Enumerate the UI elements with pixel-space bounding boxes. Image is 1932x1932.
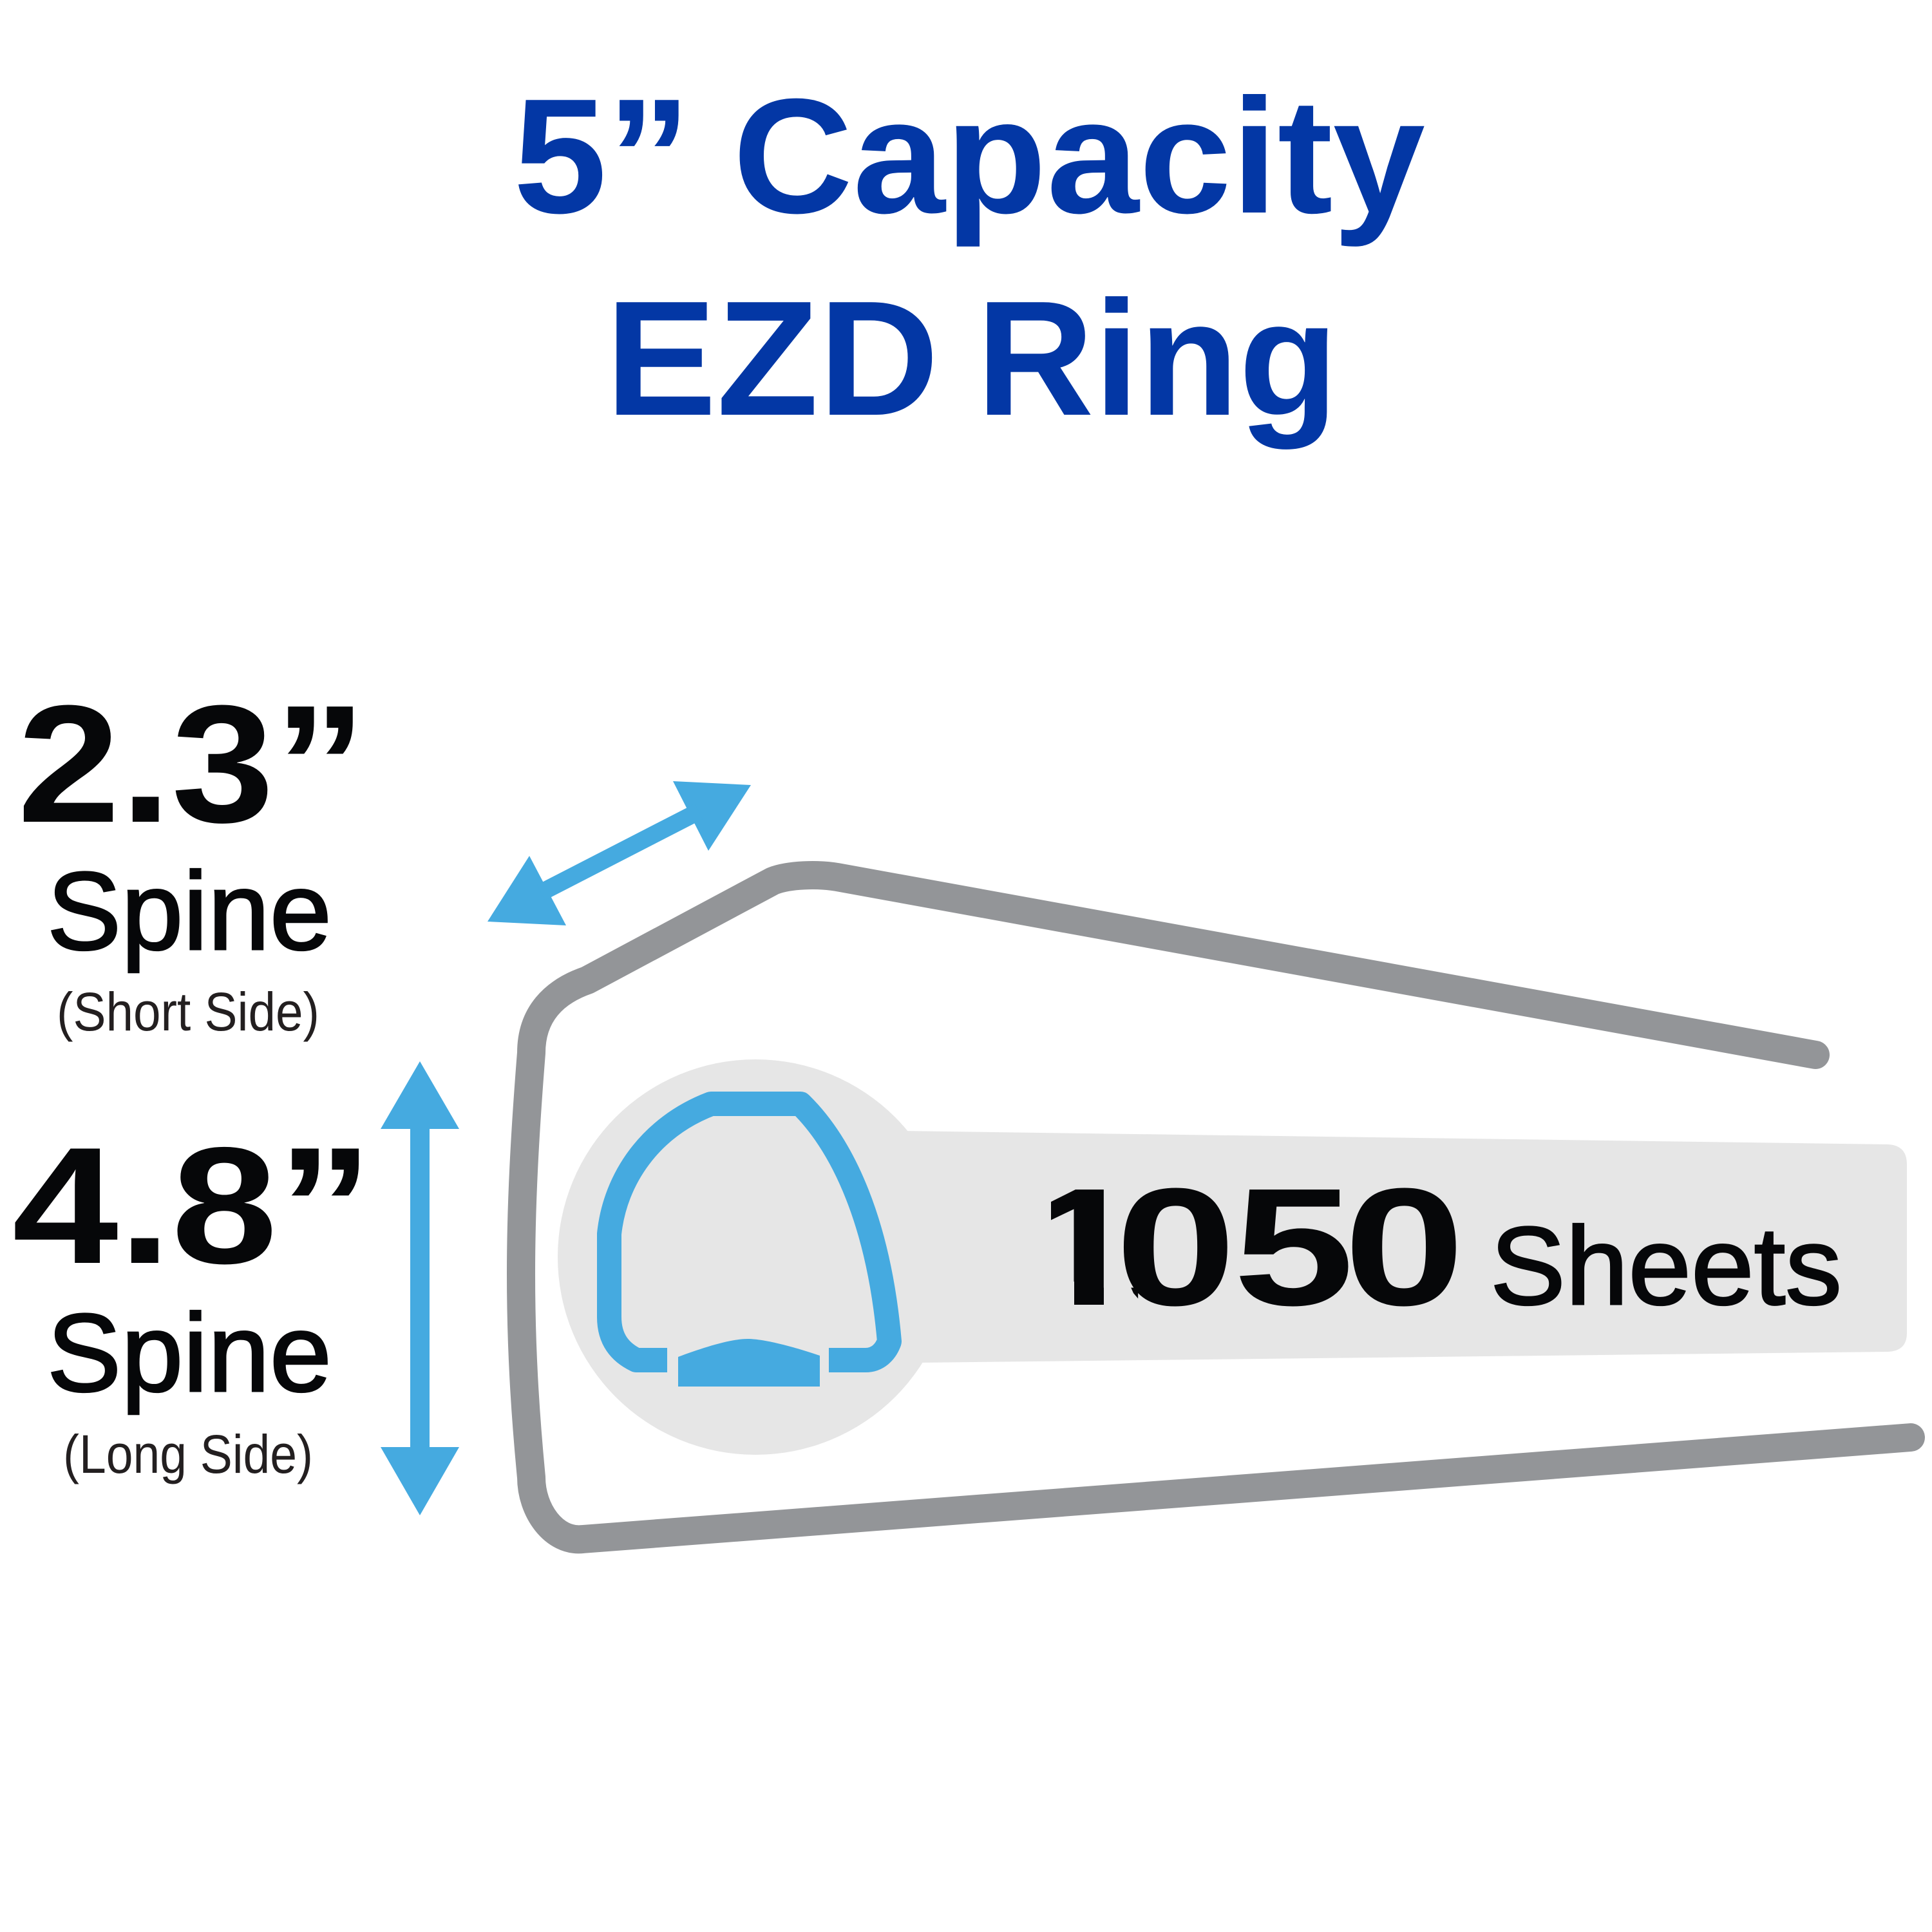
measurement: long side spine	[12, 1112, 373, 1484]
measurement: long side spine: Spine	[47, 1291, 332, 1415]
measurement: long side spine: (Long Side)	[63, 1424, 313, 1484]
arrow: spine long side	[381, 1061, 459, 1515]
sheet capacity label: 1050	[1023, 1153, 1464, 1340]
measurement: long side spine: 4.8”	[12, 1112, 373, 1298]
arrow: spine short side	[488, 781, 751, 925]
sheet capacity callout background	[558, 1059, 1907, 1455]
measurement: short side spine	[17, 671, 366, 1042]
binder outline	[521, 875, 1911, 1539]
title: Capacity	[733, 64, 1425, 247]
title: EZD	[605, 267, 939, 450]
sheet capacity label	[1051, 1188, 1839, 1306]
sheet capacity label: Sheets	[1490, 1204, 1842, 1328]
title	[513, 64, 1425, 450]
measurement: short side spine: 2.3”	[17, 671, 366, 858]
measurement: short side spine: Spine	[47, 849, 332, 973]
title: Ring	[976, 267, 1338, 450]
title: 5”	[513, 64, 691, 247]
measurement: short side spine: (Short Side)	[57, 981, 319, 1042]
icon: ring cross-section	[609, 1104, 889, 1387]
